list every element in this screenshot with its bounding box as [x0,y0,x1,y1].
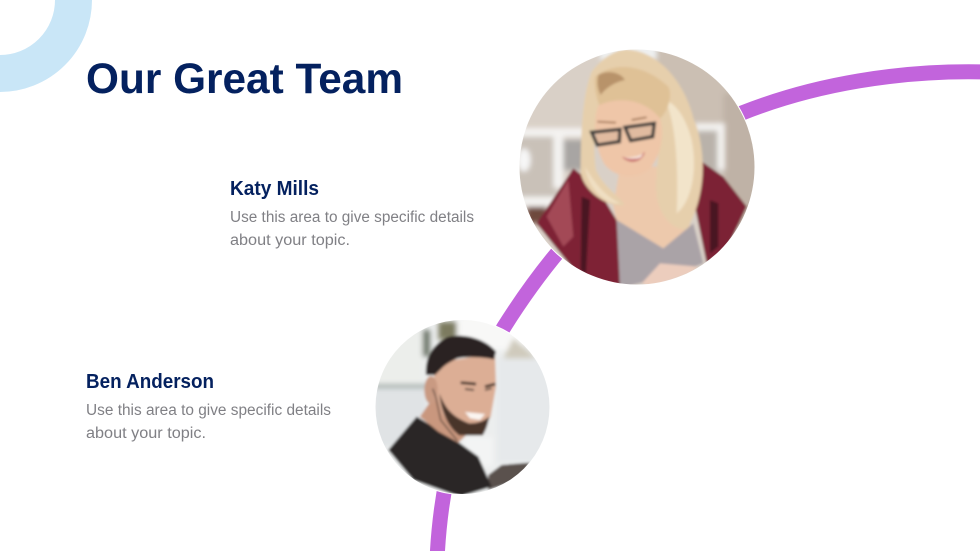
face [433,353,496,435]
earphone [433,389,457,441]
description: Ben Anderson: Use this area to give specific details [86,402,331,419]
beard [439,393,489,435]
description: Katy Mills: about your topic. [230,232,350,249]
name: Katy Mills: Katy Mills [230,178,319,200]
hair fringe [595,67,670,118]
hand [642,263,698,287]
hair [581,49,703,229]
glasses [592,123,654,145]
team member: Ben Anderson [86,371,331,442]
ear [424,376,438,404]
cardigan [537,168,622,288]
portrait: Ben Anderson [376,320,550,494]
name: Ben Anderson: Ben Anderson [86,371,214,393]
top [617,220,703,288]
chair [488,463,530,490]
description: Ben Anderson: about your topic. [86,425,206,442]
team member: Katy Mills [230,178,474,249]
shirt [388,417,492,497]
hair [426,336,496,375]
chest [613,167,690,248]
portrait: Katy Mills [520,50,754,284]
hair highlights [665,100,694,213]
description: Katy Mills: Use this area to give specific details [230,209,474,226]
eyes and smile [461,383,495,387]
title: Our Great Team [86,55,403,103]
eyebrows and mouth [597,117,647,123]
neck [419,396,466,444]
face [595,97,662,176]
decorative ring: top-left corner [0,0,74,74]
white halo gaps behind portraits [374,48,756,495]
curved purple line [437,72,980,551]
